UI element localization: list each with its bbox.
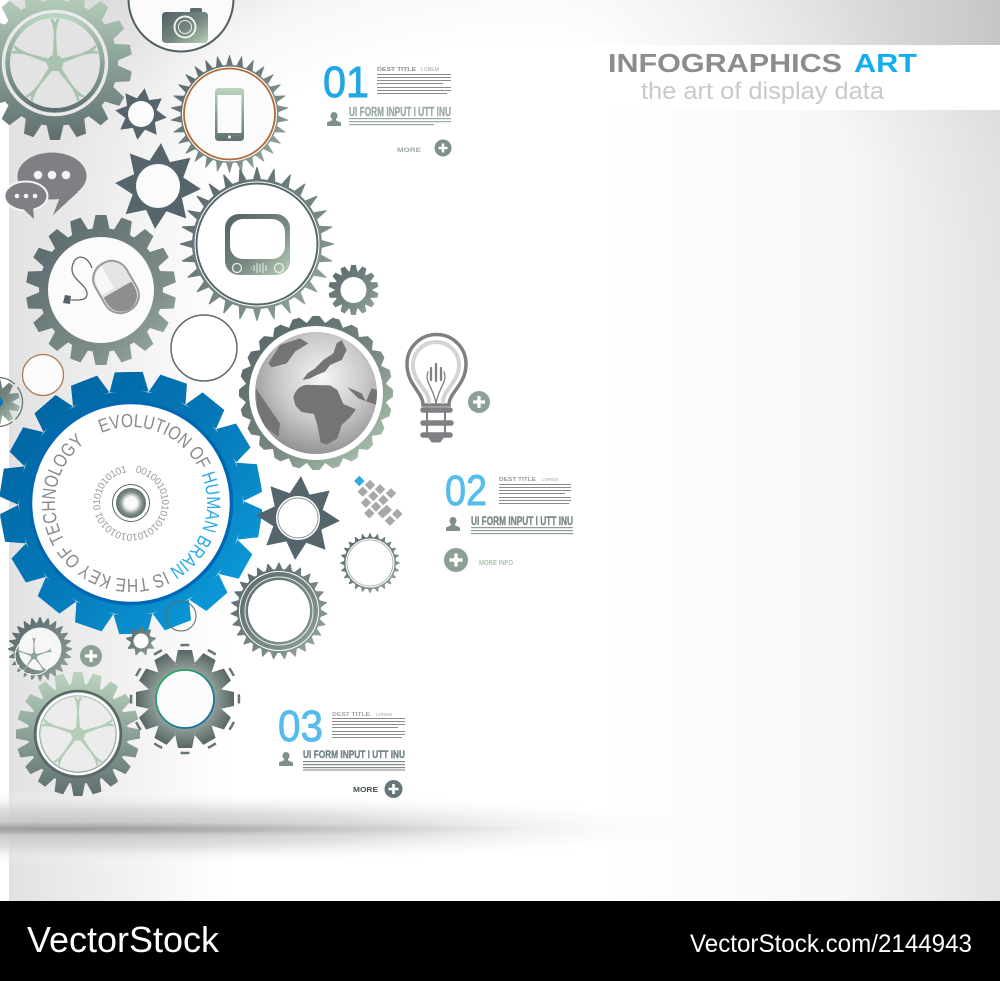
link label: MORE (397, 147, 422, 154)
plus button: lower left (80, 645, 102, 667)
subheading: UI FORM INPUT I UTT INU (303, 749, 405, 761)
hub (112, 484, 150, 522)
icon: person (279, 752, 293, 766)
blue central gear (0, 372, 262, 634)
partial gear at left edge (0, 378, 22, 426)
subheading: UI FORM INPUT I UTT INU (349, 104, 451, 119)
empty circle (171, 315, 237, 381)
icon: smartphone (215, 88, 244, 141)
number 01: 01 (323, 58, 369, 107)
plus button (444, 548, 468, 572)
body lines (377, 74, 451, 94)
title accent: ART (854, 48, 917, 78)
heading: DEST TITLE (377, 67, 416, 73)
gear: large ring (230, 562, 328, 660)
number 03: 03 (278, 702, 323, 751)
tagline: the art of display data (641, 78, 885, 105)
icon: person (446, 517, 460, 531)
body lines (499, 484, 571, 504)
diamond pixel cluster (354, 476, 402, 526)
icon: computer mouse (63, 255, 145, 319)
icon: tv set (225, 214, 290, 275)
outline circle over blue gear (166, 601, 196, 631)
globe (255, 332, 377, 454)
plus button (384, 780, 402, 798)
speech bubbles icon (4, 152, 86, 219)
gear: phone (170, 55, 288, 173)
icon circle: camera (128, 0, 234, 52)
footer logo: VectorStock (27, 919, 220, 960)
star gear large (112, 140, 204, 232)
info block 03: LOREM (376, 712, 392, 717)
info block 02 (444, 467, 573, 572)
star gear small (112, 85, 170, 143)
small gear with wheel (8, 617, 72, 681)
gear: globe (239, 316, 393, 470)
icon: camera (162, 8, 208, 43)
icon: person (327, 112, 341, 126)
footer url: VectorStock.com/2144943 (690, 930, 972, 958)
tiny sun gear (126, 626, 156, 656)
floor shadow (0, 790, 740, 866)
gear: dark ring with dashes (131, 645, 239, 753)
sub lines (471, 527, 573, 534)
gear: television (180, 167, 334, 321)
header banner (560, 45, 1000, 110)
body lines (332, 718, 405, 738)
small gear right of tv (328, 265, 378, 315)
link label: MORE INFO (479, 560, 513, 567)
icon: light bulb (407, 334, 466, 442)
gear: mouse (26, 215, 176, 365)
footer bar (0, 901, 1000, 981)
number 02: 02 (445, 467, 487, 515)
info block 02: LOREM (542, 477, 558, 482)
circular slogan: EVOLUTION OF HUMAN BRAIN IS THE KEY OF TECHNOLOGY (42, 414, 220, 592)
gear: bottom-left wheel (16, 672, 140, 796)
plus button: bulb (468, 391, 490, 413)
subheading: UI FORM INPUT I UTT INU (471, 514, 573, 528)
sub lines (349, 118, 451, 125)
binary ring: 00100101010101010101010101 0101010101 (93, 466, 169, 541)
sub lines (303, 761, 405, 770)
orange outline circle (22, 354, 64, 396)
star gear: right of blue gear (253, 473, 343, 563)
small thin gear (340, 533, 400, 593)
title: INFOGRAPHICS (608, 48, 842, 78)
gear: top-left wheel (0, 0, 132, 140)
heading: DEST TITLE (499, 477, 537, 483)
info block 03 (278, 702, 405, 798)
info block 01 (323, 58, 452, 156)
link label: MORE (353, 787, 378, 794)
heading: DEST TITLE (332, 712, 371, 718)
plus button (434, 140, 452, 156)
info block 01: LOREM (421, 67, 439, 73)
